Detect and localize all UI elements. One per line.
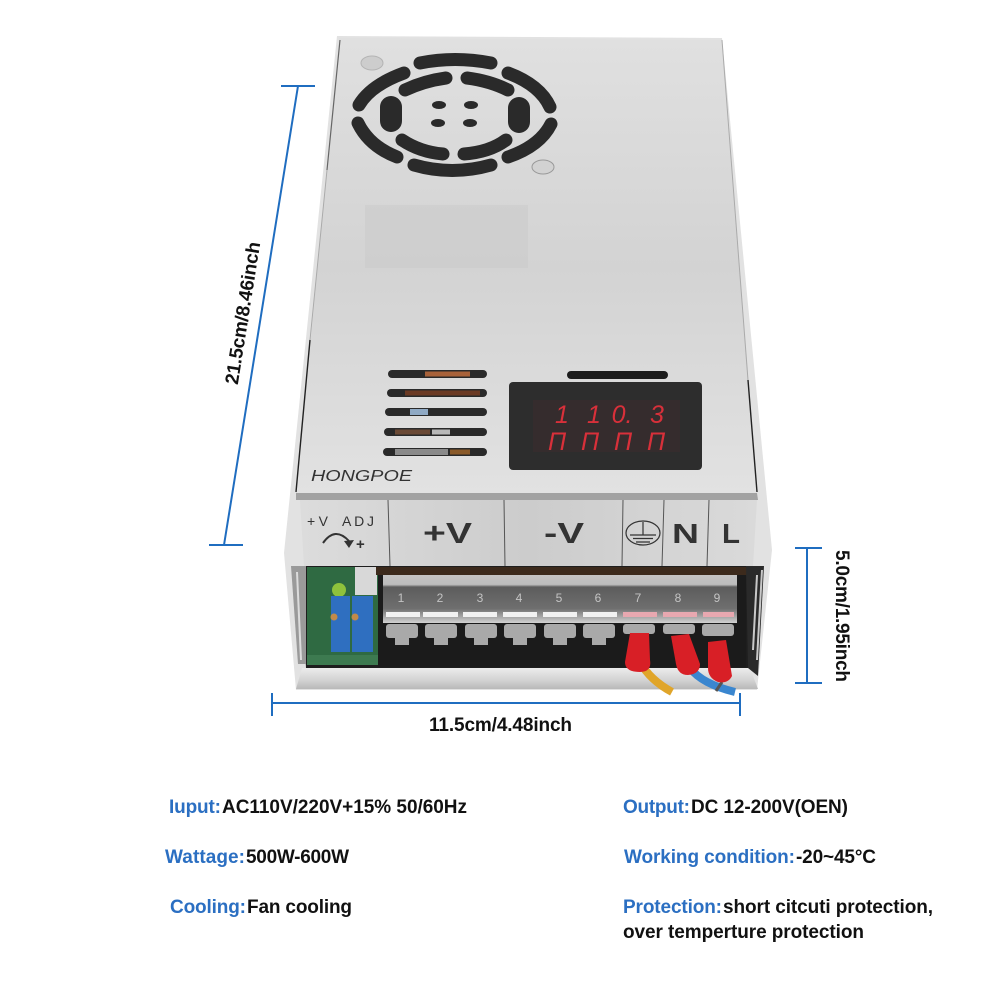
+V terminal label: +V <box>423 518 473 550</box>
digital voltmeter display: 1 <box>555 401 569 429</box>
terminal numbers: 6 <box>595 591 602 605</box>
spec: cooling: Cooling: <box>170 897 246 918</box>
spec: working condition: -20~45°C <box>796 847 876 868</box>
wires and crimp terminals <box>625 633 735 692</box>
metal casing silhouette <box>284 36 772 690</box>
power supply product <box>284 36 772 692</box>
spec: protection: Protection: <box>623 897 722 918</box>
terminal numbers: 9 <box>714 591 721 605</box>
spec: output: DC 12-200V(OEN) <box>691 797 848 818</box>
spec: output <box>623 797 848 818</box>
digital voltmeter display: 0. <box>612 401 632 429</box>
icon: screw top left <box>361 56 383 70</box>
digital voltmeter display: 3 <box>650 401 664 429</box>
spec: protection <box>623 897 933 943</box>
width label: 11.5cm/4.48inch <box>429 715 572 736</box>
spec: protection: short citcuti protection, <box>723 897 933 918</box>
digital voltmeter display: Π <box>548 428 567 456</box>
N terminal label: N <box>672 518 699 549</box>
lower lip <box>296 668 758 689</box>
spec: working condition <box>624 847 876 868</box>
digital voltmeter display: 1 <box>587 401 601 429</box>
spec: input: Iuput: <box>169 797 221 818</box>
terminal numbers: 3 <box>477 591 484 605</box>
dimension: length <box>209 86 315 545</box>
top face <box>296 38 757 497</box>
spec: input: AC110V/220V+15% 50/60Hz <box>222 797 467 818</box>
right side vents <box>746 566 764 676</box>
digital voltmeter display: Π <box>647 428 666 456</box>
spec: working condition: Working condition: <box>624 847 795 868</box>
left side vents <box>291 566 306 664</box>
brand name: HONGPOE <box>311 468 413 485</box>
label panel <box>300 500 757 566</box>
spec: wattage <box>165 847 349 868</box>
digital voltmeter display: Π <box>581 428 600 456</box>
spec: protection: over temperture protection <box>623 922 864 943</box>
adjust label <box>307 513 374 553</box>
spec: cooling: Fan cooling <box>247 897 352 918</box>
terminal block <box>376 567 750 667</box>
terminal bay <box>302 566 752 668</box>
dimension: height <box>795 548 852 683</box>
height label: 5.0cm/1.95inch <box>831 550 852 682</box>
digital voltmeter display: Π <box>614 428 633 456</box>
spec: output: Output: <box>623 797 690 818</box>
dimension: width <box>272 693 740 736</box>
spec: cooling <box>170 897 352 918</box>
terminal numbers: 8 <box>675 591 682 605</box>
spec: wattage: Wattage: <box>165 847 245 868</box>
vent slots <box>387 374 664 452</box>
length label: 21.5cm/8.46inch <box>222 240 265 386</box>
faint sticker mark <box>365 205 528 268</box>
adjust label: ADJ <box>342 513 374 529</box>
icon: fan grille <box>358 60 551 170</box>
control circuit board <box>307 567 378 665</box>
adjust label: + <box>356 536 365 553</box>
terminal numbers: 7 <box>635 591 642 605</box>
icon: screw lower right <box>532 160 554 174</box>
terminal numbers <box>398 591 721 605</box>
L terminal label: L <box>722 518 740 549</box>
terminal numbers: 2 <box>437 591 444 605</box>
-V terminal label: -V <box>544 518 585 550</box>
digital voltmeter display <box>509 382 702 470</box>
transparent terminal cover <box>383 575 737 623</box>
spec: wattage: 500W-600W <box>246 847 349 868</box>
terminal screws <box>386 624 734 645</box>
icon: ground symbol <box>626 521 660 545</box>
terminal numbers: 1 <box>398 591 405 605</box>
adjust label: +V <box>307 513 329 529</box>
terminal numbers: 4 <box>516 591 523 605</box>
terminal numbers: 5 <box>556 591 563 605</box>
seam bar <box>296 493 758 500</box>
